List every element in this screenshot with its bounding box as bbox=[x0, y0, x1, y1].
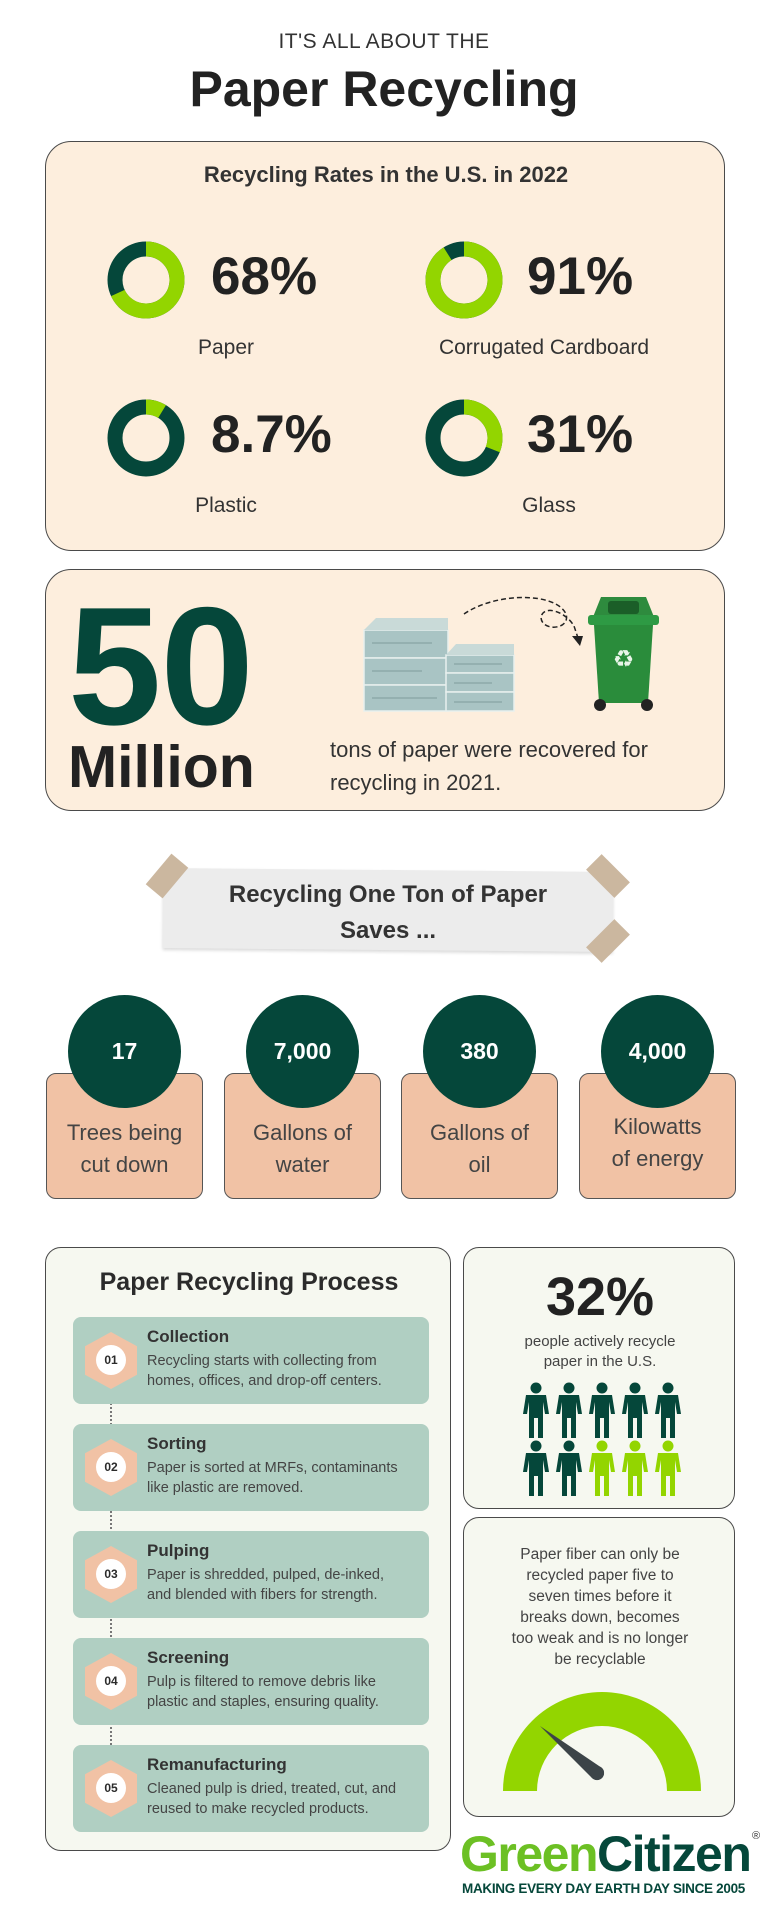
dotted connector bbox=[110, 1368, 112, 1788]
step 04 screening: Screening bbox=[147, 1648, 229, 1667]
panel: fiber gauge bbox=[463, 1517, 735, 1817]
step 05 remanufacturing: 05 bbox=[104, 1781, 118, 1795]
donut: glass 31%: 31% bbox=[527, 405, 633, 464]
step 03 pulping bbox=[73, 1531, 429, 1618]
stat card: 17 trees: Trees being bbox=[67, 1120, 182, 1145]
text: fiber limit: too weak and is no longer bbox=[512, 1630, 688, 1647]
heading: recycling rates: Recycling Rates in the U.S. in 2022 bbox=[204, 162, 568, 187]
step 01 collection: Recycling starts with collecting from bbox=[147, 1353, 377, 1369]
panel: 32% people bbox=[463, 1247, 735, 1509]
donut: plastic 8.7%: 8.7% bbox=[211, 405, 332, 464]
step 04 screening bbox=[73, 1638, 429, 1725]
donut: cardboard 91%: Corrugated Cardboard bbox=[439, 336, 649, 359]
step 04 screening: Pulp is filtered to remove debris like bbox=[147, 1674, 376, 1690]
million: Million bbox=[68, 734, 255, 800]
stat card: 380 gallons oil: oil bbox=[468, 1152, 490, 1177]
step 02 sorting: Sorting bbox=[147, 1434, 206, 1453]
step 05 remanufacturing: Cleaned pulp is dried, treated, cut, and bbox=[147, 1781, 396, 1797]
title: Paper Recycling bbox=[189, 61, 579, 117]
text: people recycle: paper in the U.S. bbox=[544, 1353, 656, 1370]
text: fiber limit bbox=[512, 1546, 688, 1668]
stat card: 380 gallons oil: Gallons of bbox=[430, 1120, 529, 1145]
step 05 remanufacturing: reused to make recycled products. bbox=[147, 1801, 369, 1817]
banner: recycling one ton saves bbox=[146, 854, 630, 963]
logo: GreenCitizen: MAKING EVERY DAY EARTH DAY SINCE 2005 bbox=[462, 1881, 745, 1896]
text: tons recovered: tons of paper were recovered for recycling in 2021. bbox=[330, 737, 648, 795]
step 04 screening: 04 bbox=[104, 1674, 118, 1688]
step 03 pulping: and blended with fibers for strength. bbox=[147, 1587, 378, 1603]
step 01 collection bbox=[73, 1317, 429, 1404]
step 05 remanufacturing: Remanufacturing bbox=[147, 1755, 287, 1774]
icon: paper stacks bbox=[363, 618, 515, 712]
icon: people grid bbox=[523, 1382, 681, 1496]
gauge bbox=[503, 1692, 701, 1791]
stat card: 4,000 kilowatts bbox=[579, 995, 736, 1199]
panel: paper recycling process bbox=[45, 1247, 451, 1851]
subtitle: IT'S ALL ABOUT THE bbox=[278, 30, 490, 53]
step 01 collection: homes, offices, and drop-off centers. bbox=[147, 1373, 382, 1389]
stat card: 4,000 kilowatts: of energy bbox=[612, 1146, 703, 1171]
donut: plastic 8.7%: Plastic bbox=[195, 494, 257, 517]
step 02 sorting: Paper is sorted at MRFs, contaminants bbox=[147, 1460, 398, 1476]
panel: 50 million bbox=[45, 569, 725, 811]
donut: glass 31% bbox=[426, 400, 633, 517]
heading: process: Paper Recycling Process bbox=[100, 1268, 398, 1296]
text: fiber limit: recycled paper five to bbox=[526, 1567, 674, 1584]
step 01 collection: Collection bbox=[147, 1327, 229, 1346]
stat card: 7,000 gallons water: Gallons of bbox=[253, 1120, 352, 1145]
text: fiber limit: seven times before it bbox=[528, 1588, 672, 1605]
banner: recycling one ton saves: Recycling One Ton of Paper bbox=[229, 881, 547, 908]
stat card: 7,000 gallons water: 7,000 bbox=[274, 1038, 331, 1064]
step 02 sorting: 02 bbox=[104, 1460, 118, 1474]
icon: recycle bin: ♻ bbox=[613, 646, 634, 673]
stat card: 4,000 kilowatts: Kilowatts bbox=[613, 1114, 702, 1139]
big number 50: 50 bbox=[68, 572, 253, 760]
logo: GreenCitizen: ® bbox=[752, 1830, 760, 1842]
step 04 screening: plastic and staples, ensuring quality. bbox=[147, 1694, 379, 1710]
text: people recycle bbox=[525, 1333, 675, 1370]
step 01 collection: 01 bbox=[104, 1353, 118, 1367]
text: fiber limit: breaks down, becomes bbox=[520, 1609, 680, 1626]
donut: cardboard 91% bbox=[426, 242, 649, 359]
step 03 pulping: Pulping bbox=[147, 1541, 209, 1560]
stat card: 4,000 kilowatts: 4,000 bbox=[629, 1038, 686, 1064]
step 03 pulping: 03 bbox=[104, 1567, 118, 1581]
stat card: 380 gallons oil: 380 bbox=[460, 1038, 499, 1064]
banner: recycling one ton saves: Saves ... bbox=[340, 917, 436, 944]
text: people recycle: people actively recycle bbox=[525, 1333, 675, 1350]
donut: glass 31%: Glass bbox=[522, 494, 576, 517]
icon: recycle bin bbox=[588, 597, 659, 711]
stat card: 7,000 gallons water bbox=[224, 995, 381, 1199]
step 02 sorting bbox=[73, 1424, 429, 1511]
donut: paper 68%: Paper bbox=[198, 336, 254, 359]
arrow: dashed curve bbox=[464, 596, 583, 646]
text: fiber limit: Paper fiber can only be bbox=[520, 1546, 680, 1563]
step 05 remanufacturing bbox=[73, 1745, 429, 1832]
stat card: 17 trees: 17 bbox=[112, 1038, 137, 1064]
step 02 sorting: like plastic are removed. bbox=[147, 1480, 303, 1496]
donut: paper 68%: 68% bbox=[211, 247, 317, 306]
donut: cardboard 91%: 91% bbox=[527, 247, 633, 306]
step 03 pulping: Paper is shredded, pulped, de-inked, bbox=[147, 1567, 384, 1583]
panel: recycling rates bbox=[45, 141, 725, 551]
logo: GreenCitizen: GreenCitizen bbox=[460, 1826, 750, 1882]
donut: plastic 8.7% bbox=[108, 400, 332, 517]
stat card: 17 trees bbox=[46, 995, 203, 1199]
stat card: 380 gallons oil bbox=[401, 995, 558, 1199]
stat card: 7,000 gallons water: water bbox=[276, 1152, 329, 1177]
text: fiber limit: be recyclable bbox=[554, 1651, 646, 1668]
stat card: 17 trees: cut down bbox=[80, 1152, 169, 1177]
donut: paper 68% bbox=[108, 242, 317, 359]
big stat 32%: 32% bbox=[546, 1267, 654, 1327]
